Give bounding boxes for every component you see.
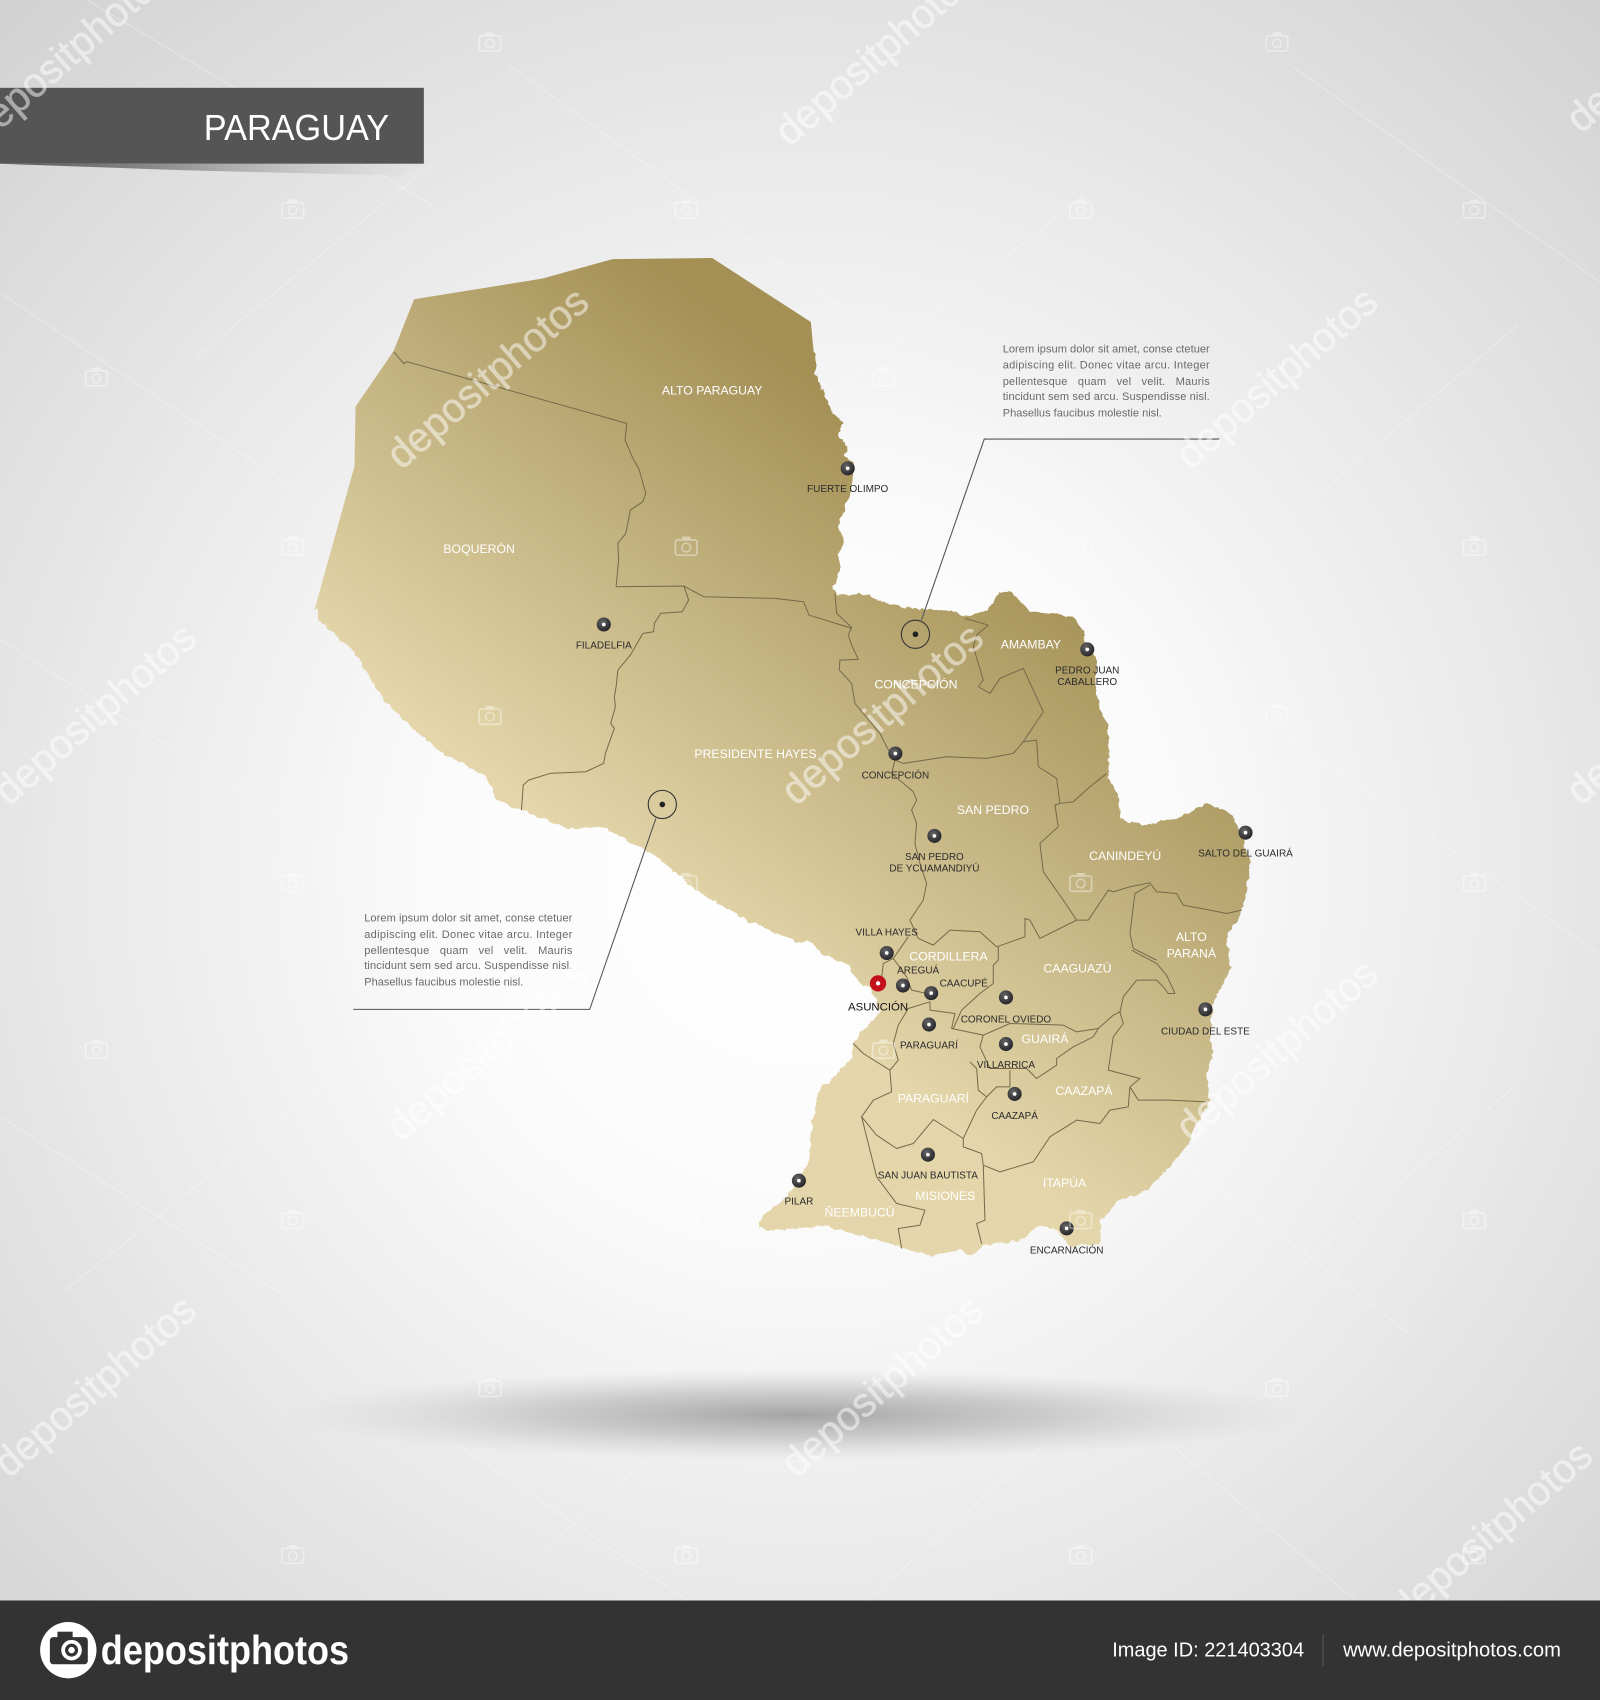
central borders: [835, 593, 1242, 960]
city labels: SALTO DEL GUAIRÁ: [1198, 849, 1293, 860]
leader line: [353, 819, 656, 1009]
callout text: Phasellus faucibus molestie nisl.: [1003, 407, 1162, 419]
footer bar: [0, 1600, 1600, 1700]
watermarks: depositphotos: [377, 950, 597, 1150]
leader line: [921, 439, 1220, 620]
province labels: PARANÁ: [1167, 945, 1217, 960]
city labels: CABALLERO: [1057, 677, 1117, 688]
callout text: [364, 913, 573, 989]
watermarks: depositphotos: [772, 614, 992, 814]
map of Paraguay: [314, 258, 1293, 1257]
province labels: CAAZAPÁ: [1055, 1083, 1113, 1098]
city labels: CAAZAPÁ: [991, 1111, 1038, 1122]
city labels: ASUNCIÓN: [848, 1000, 908, 1013]
province labels: ÑEEMBUCÚ: [825, 1204, 895, 1219]
province labels: SAN PEDRO: [957, 803, 1029, 817]
callout text: Lorem ipsum dolor sit amet, conse ctetuer: [364, 913, 573, 925]
image id: Image ID: 221403304: [1112, 1639, 1304, 1662]
logo wordmark: depositphotos: [101, 1627, 349, 1673]
north-west borders: [394, 352, 852, 810]
province labels: ALTO PARAGUAY: [662, 384, 762, 398]
city labels: FUERTE OLIMPO: [807, 484, 889, 495]
ribbon shadow: [0, 164, 424, 176]
callout text: Phasellus faucibus molestie nisl.: [364, 977, 523, 989]
province labels: PRESIDENTE HAYES: [694, 747, 817, 761]
province borders: [394, 352, 1242, 1249]
callout text: pellentesque quam vel velit. Mauris: [364, 945, 573, 957]
province labels: CANINDEYÚ: [1089, 848, 1161, 863]
callout text: pellentesque quam vel velit. Mauris: [1003, 376, 1210, 388]
watermarks: depositphotos: [1381, 1431, 1600, 1631]
province labels: AMAMBAY: [1001, 637, 1061, 651]
city markers: [597, 461, 1253, 1235]
watermark camera icons: [86, 33, 1485, 1563]
city labels: PILAR: [785, 1197, 813, 1208]
title: PARAGUAY: [204, 108, 389, 148]
city labels: ENCARNACIÓN: [1030, 1245, 1103, 1256]
city labels: [576, 484, 1293, 1256]
callout target: [648, 790, 676, 819]
province labels: ITAPÚA: [1043, 1175, 1087, 1190]
city labels: CORONEL OVIEDO: [961, 1014, 1051, 1025]
province labels: ALTO: [1176, 930, 1207, 944]
city labels: DE YCUAMANDIYÚ: [889, 864, 979, 875]
icon: camera: [40, 1622, 96, 1678]
province labels: GUAIRÁ: [1022, 1031, 1069, 1046]
city labels: SAN JUAN BAUTISTA: [878, 1171, 978, 1182]
callout: top right: [901, 343, 1220, 648]
callout text: adipiscing elit. Donec vitae arcu. Integer: [1003, 360, 1210, 372]
province labels: PARAGUARÍ: [898, 1091, 970, 1106]
city labels: VILLA HAYES: [856, 928, 918, 939]
ground shadow: [287, 1369, 1306, 1460]
callout text: [1003, 343, 1210, 419]
watermarks: depositphotos: [1166, 278, 1386, 477]
website: www.depositphotos.com: [1342, 1639, 1561, 1662]
footer logo: [40, 1622, 349, 1678]
watermarks: depositphotos: [377, 278, 597, 477]
city labels: CONCEPCIÓN: [862, 770, 929, 781]
watermarks: depositphotos: [772, 1286, 992, 1486]
province labels: [443, 384, 1217, 1219]
city labels: PARAGUARÍ: [900, 1040, 958, 1051]
callout text: Lorem ipsum dolor sit amet, conse ctetuer: [1003, 343, 1210, 355]
province labels: CAAGUAZÚ: [1043, 961, 1112, 976]
city labels: AREGUÁ: [897, 966, 940, 977]
callout target: [901, 620, 930, 648]
city labels: CIUDAD DEL ESTE: [1161, 1026, 1250, 1037]
city labels: CAACUPÉ: [940, 979, 988, 990]
title ribbon: [0, 88, 424, 176]
city labels: PEDRO JUAN: [1055, 665, 1119, 676]
city labels: FILADELFIA: [576, 640, 632, 651]
watermarks: depositphotos: [1166, 950, 1386, 1150]
province labels: CORDILLERA: [909, 950, 988, 964]
city labels: SAN PEDRO: [905, 852, 964, 863]
province labels: BOQUERÓN: [443, 541, 515, 556]
province labels: MISIONES: [915, 1189, 975, 1203]
capital marker: [870, 975, 886, 991]
title bar: [0, 88, 424, 164]
callout text: adipiscing elit. Donec vitae arcu. Integer: [364, 929, 573, 941]
province labels: CONCEPCIÓN: [874, 676, 958, 691]
southern borders: [853, 937, 1207, 1249]
callout: bottom left: [353, 790, 676, 1009]
callout text: tincidunt sem sed arcu. Suspendisse nisl.: [364, 960, 572, 972]
city labels: VILLARRICA: [977, 1060, 1035, 1071]
land: [314, 258, 1250, 1257]
callout text: tincidunt sem sed arcu. Suspendisse nisl.: [1003, 391, 1210, 403]
